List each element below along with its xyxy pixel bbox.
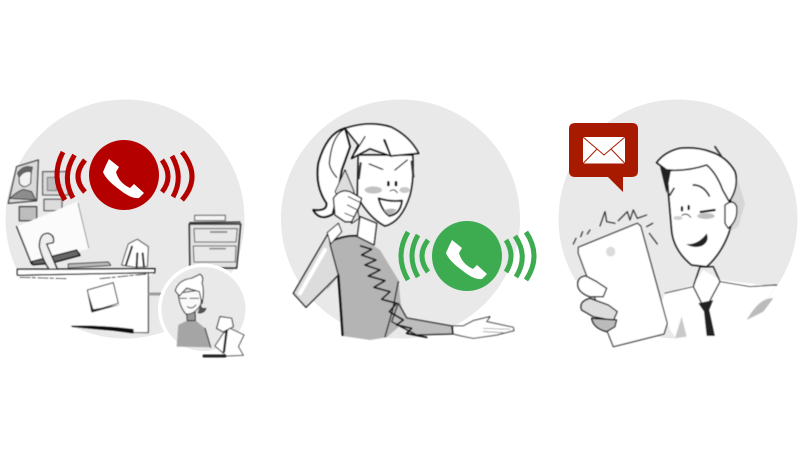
nose [388,182,396,185]
head shadow [723,177,745,233]
hair [657,148,736,202]
inset: receptionist circle [158,264,249,356]
extended arm [392,303,453,335]
desk phone [215,328,244,356]
woman hand [217,317,233,332]
handset [103,159,144,198]
neck and collar [357,217,377,245]
open hand [453,317,514,338]
woman figure [293,124,514,340]
mouth [379,198,402,216]
shirt [662,270,777,339]
coiled cord [361,246,427,337]
panel: missed call in empty office [6,100,249,356]
vibration marks [573,210,657,244]
ear [725,202,737,228]
ponytail [313,128,350,217]
sound waves right [506,232,534,280]
blush [697,213,715,219]
phone handset and hand [335,170,359,223]
filing cabinet [189,215,241,268]
desk note [87,283,121,313]
desk telephone [122,239,148,267]
computer monitor [17,202,89,271]
fingers [578,276,607,297]
raised arm [293,233,338,307]
desk [7,269,161,334]
handset [446,240,487,279]
wall pictures [19,172,68,221]
background circle: office [6,100,244,338]
background circle: man [558,100,798,338]
panel: woman answering the phone [281,100,534,340]
phone back [578,223,667,347]
blush [365,186,382,194]
face [357,155,413,226]
sound waves right [162,152,192,200]
panel: man reading a message [558,100,798,347]
framed portrait [8,160,38,203]
necktie [698,300,715,336]
background circle: woman [281,100,520,338]
message bubble [569,123,638,192]
mouth [686,233,708,247]
eyes and nose [682,206,715,212]
sound waves left [57,152,85,200]
answering icon: green phone [401,221,534,291]
sweater [327,235,407,340]
envelope icon [583,137,625,164]
keyboard [68,262,111,268]
face [667,160,732,267]
hair [345,124,419,158]
eye lashes and brows [359,162,413,179]
woman bust [177,320,211,347]
ringing icon: red phone [57,140,192,210]
man figure [573,147,777,347]
woman head [178,290,201,314]
sound waves left [401,232,428,280]
